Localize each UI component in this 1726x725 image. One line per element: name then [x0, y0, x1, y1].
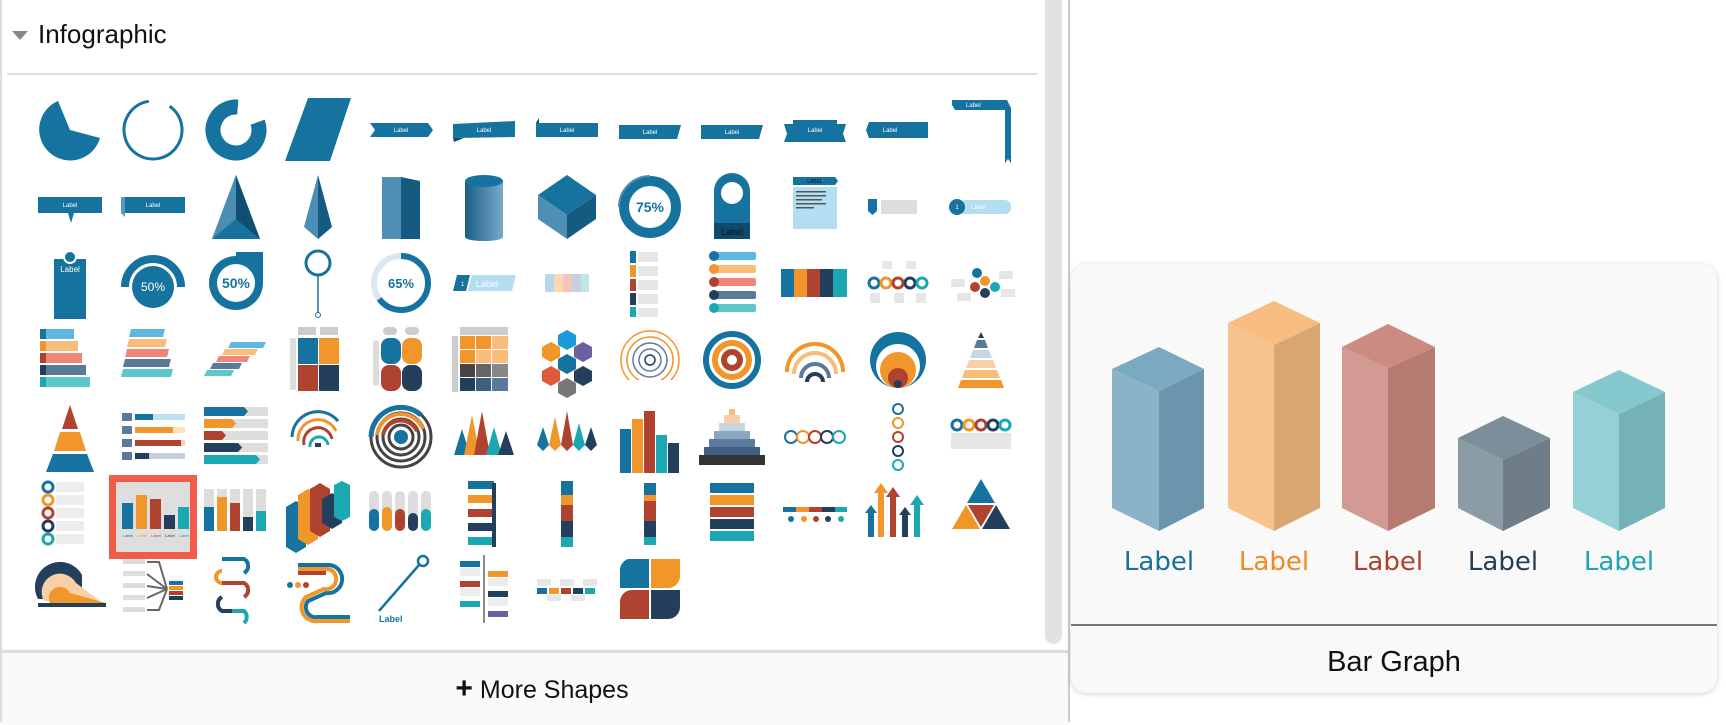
left shape panel: [0, 0, 1068, 722]
icon: numbered parallelogram: 1: [461, 282, 465, 288]
icon: stripe pyramid: [958, 332, 1004, 388]
icon: spiral: [35, 562, 106, 607]
heading: Infographic: Infographic: [38, 19, 167, 49]
icon: folded label: [121, 197, 185, 217]
icon: ribbon 3: [536, 118, 598, 137]
icon: numbered pill: 1: [955, 205, 959, 211]
panel header: [2, 0, 1042, 74]
icon: tubes: [369, 491, 431, 531]
icon: nested circles: [868, 332, 928, 394]
icon: ribbon 1: [370, 123, 433, 137]
icon: 3D bar graph (selected): Label: [123, 533, 133, 538]
icon: colored columns: [781, 269, 847, 297]
icon: step labels: [40, 329, 90, 387]
bar 5 teal: [1573, 370, 1665, 531]
icon: callout label: [38, 197, 102, 223]
icon: 3x4 grid: [452, 327, 508, 392]
icon: ribbon 4: Label: [643, 130, 657, 136]
icon: 3D bar graph (selected): Label: [151, 533, 161, 538]
icon: stacked list: [710, 483, 754, 541]
icon: 2x2 grid: [290, 327, 339, 391]
bar labels: Label: [1239, 547, 1309, 577]
icon: hanging label: [54, 251, 86, 319]
icon: diamond peaks: [537, 411, 597, 451]
icon: dark rings: [371, 407, 431, 467]
icon: tag label: Label: [721, 227, 743, 237]
icon: vertical circles: [893, 404, 903, 470]
icon: prism: [382, 177, 420, 239]
icon: 50% ring: 50%: [222, 275, 251, 291]
icon: tree diagram: [123, 559, 183, 612]
icon: 65% ring: [374, 256, 428, 310]
icon: thin arc: [113, 90, 193, 170]
icon: progress bars: [122, 413, 185, 460]
icon: vertical timeline: [460, 555, 508, 623]
icon: ribbon 3: Label: [560, 128, 574, 134]
icon: four petals: [620, 559, 680, 619]
icon: text box: [793, 177, 838, 229]
bar labels: Label: [1353, 547, 1423, 577]
icon: isometric 3D bars: [286, 481, 350, 553]
icon: vertical circle list: [43, 482, 84, 544]
footer: More Shapes: [2, 650, 1068, 725]
card caption: Bar Graph: [1327, 646, 1461, 678]
icon: rounded 2x2: [373, 327, 422, 391]
icon: slanted labels: [121, 329, 173, 377]
icon: donut 75%: 75%: [636, 199, 665, 215]
icon: slim cylinder: [644, 483, 656, 545]
icon: timeline circles: [783, 507, 847, 522]
icon: 3D bar graph (selected): Label: [137, 533, 147, 538]
icon: stacked cylinder: [561, 481, 573, 547]
icon: ribbon 4: [619, 125, 681, 139]
icon: 50% ring: [209, 252, 263, 310]
icon: 3D bar graph (selected): [122, 495, 189, 538]
icon: ribbon 5: Label: [725, 130, 739, 136]
icon: up arrows: [865, 483, 924, 537]
icon: numbered pills: [709, 251, 756, 313]
icon: tag label: [714, 173, 750, 239]
icon: numbered pill: Label: [971, 205, 986, 211]
icon: shield with box: [868, 199, 917, 215]
bar 2 orange: [1228, 301, 1320, 531]
icon: callout label: Label: [63, 203, 77, 209]
bar labels: Label: [1124, 547, 1194, 577]
icon: corner ribbon: [952, 100, 1011, 163]
bar labels: Label: [1468, 547, 1538, 577]
3D bar chart: [1112, 301, 1665, 577]
icon: target: [706, 334, 758, 386]
icon: arrow bars: [204, 407, 268, 464]
icon: circle row: [785, 431, 845, 443]
icon: circle chain: [869, 261, 927, 303]
bar labels: [1124, 547, 1654, 577]
icon: 3D bar graph (selected): Label: [179, 533, 189, 538]
icon: corner ribbon: Label: [966, 103, 981, 109]
icon: S-curve: [216, 559, 248, 623]
icon: cylinder: [465, 175, 503, 241]
icon: folded label: Label: [146, 203, 160, 209]
icon: cube: [538, 175, 596, 239]
icon: numbered parallelogram: Label: [476, 279, 498, 289]
icon: ribbon 7: Label: [883, 128, 897, 134]
icon: collapse triangle: [12, 31, 28, 40]
bar 4 slate: [1458, 416, 1550, 531]
icon: circle cluster: [951, 268, 1015, 301]
vertical divider: [1068, 0, 1070, 722]
footer: More Shapes: + More Shapes: [455, 672, 629, 705]
icon: layered pyramid: [46, 405, 94, 472]
icon: ribbon 6: [784, 120, 846, 142]
icon: triangle of triangles: [952, 479, 1010, 529]
icon: rainbow arcs: [787, 344, 843, 382]
icon: circles with boxes: [951, 420, 1011, 449]
icon: thick C: [207, 101, 265, 159]
icon: stepped pyramid: [699, 409, 765, 465]
bar labels: Label: [1584, 547, 1654, 577]
shape grid: [34, 98, 1015, 624]
icon: color table: [545, 274, 589, 292]
icon: donut 75%: [619, 176, 676, 233]
icon: pyramid: [212, 175, 260, 239]
icon: column bars: [620, 411, 679, 473]
bar 3 red: [1342, 324, 1435, 531]
icon: 50% arc: 50%: [141, 280, 165, 294]
icon: 3D bar graph (selected): Label: [165, 533, 175, 538]
icon: thin pyramid: [304, 175, 332, 239]
icon: ribbon 2: [453, 121, 515, 142]
bar 1 blue: [1112, 347, 1204, 531]
icon: pin line: Label: [379, 614, 403, 624]
icon: ribbon 1: Label: [394, 128, 408, 134]
icon: concentric arcs: [618, 331, 682, 394]
icon: ribbon tabs: [468, 481, 496, 547]
icon: glass cylinders: [204, 489, 266, 531]
icon: numbered parallelogram: [453, 275, 516, 291]
icon: 50% arc: [125, 259, 181, 308]
selected cell highlight: [109, 475, 197, 559]
icon: 65% ring: 65%: [388, 276, 414, 291]
icon: peaks: [454, 411, 514, 455]
icon: pin line: [379, 556, 428, 624]
icon: ribbon 7: [866, 122, 928, 138]
preview card: Bar Graph: [1071, 264, 1717, 693]
icon: small arcs: [292, 412, 338, 447]
icon: pin: [306, 251, 330, 318]
icon: small slanted stack: [204, 342, 266, 376]
icon: small box row: [537, 579, 597, 601]
icon: hexagons: [542, 330, 592, 398]
icon: tab list: [630, 251, 658, 317]
icon: hanging label: Label: [60, 265, 80, 274]
scrollbar: [1045, 0, 1062, 644]
icon: ribbon 5: [701, 125, 763, 139]
icon: winding road: [287, 565, 350, 621]
icon: parallelogram: [285, 98, 351, 161]
icon: ribbon 6: Label: [808, 128, 822, 134]
icon: ribbon 2: Label: [477, 128, 491, 134]
icon: text box: LABEL: [807, 179, 823, 185]
icon: numbered pill: [949, 199, 1011, 215]
icon: pie: [39, 101, 100, 161]
